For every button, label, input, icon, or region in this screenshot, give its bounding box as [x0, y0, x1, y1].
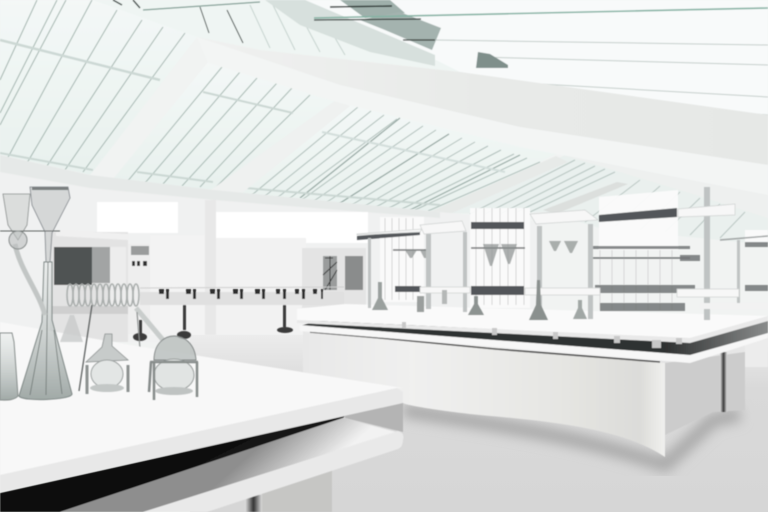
- clerestory lines: [435, 40, 768, 115]
- service rail with clamps: [133, 287, 344, 341]
- fume hood: left: [50, 230, 128, 342]
- chrome leg: [720, 352, 727, 412]
- left beaker: [0, 333, 18, 400]
- island dark gap: [300, 318, 768, 356]
- under-shelf line: [310, 332, 660, 362]
- flasks on bench: [372, 280, 587, 320]
- glassware on front bench: [0, 187, 198, 400]
- top-left glazing: [93, 0, 460, 72]
- glass tube bend: [15, 244, 45, 315]
- far-right glass stand: [700, 236, 768, 309]
- white reagent boards: [380, 190, 768, 308]
- thin stand rods: [137, 312, 143, 385]
- support block under shelf: [262, 470, 332, 512]
- window: center: [216, 212, 368, 243]
- white shelves: [357, 204, 739, 297]
- island base: [303, 331, 665, 457]
- skylight: right bays: [545, 172, 768, 245]
- back wall panel: [216, 238, 306, 334]
- far cone flask: [60, 315, 83, 342]
- clerestory: upper white panels: [290, 0, 768, 118]
- vertical tube lines: [385, 208, 672, 310]
- skylight: far left: [0, 0, 200, 175]
- mid rails: [393, 248, 690, 258]
- floor: [190, 335, 768, 512]
- rafter: center: [208, 100, 350, 198]
- floor shadow beside bench: [345, 400, 403, 432]
- left equipment behind bench: [67, 284, 163, 385]
- bench bolts: [402, 322, 682, 348]
- main roof beam: lower face: [197, 37, 768, 195]
- condenser tube: [136, 308, 163, 340]
- front lab bench: [0, 322, 403, 512]
- far equipment cabinet: [302, 248, 366, 308]
- stir rod: [79, 305, 92, 391]
- round flask stand: left: [86, 334, 128, 394]
- upper glass pane: [314, 0, 768, 50]
- skylight: third bay: [234, 100, 560, 212]
- rail supports: [133, 305, 293, 341]
- bench front lip: [297, 316, 768, 343]
- separatory funnels: [405, 241, 578, 266]
- main roof beam: upper face: [197, 37, 768, 165]
- chrome leg under shelf: [245, 495, 262, 512]
- secondary beam: [563, 155, 768, 218]
- island side: [665, 352, 745, 435]
- upright posts: [368, 187, 740, 320]
- rafter: left: [88, 37, 208, 183]
- rafter: right: [425, 156, 568, 214]
- floor shadow around island: [403, 410, 740, 465]
- round flask stand: right: [149, 336, 198, 400]
- control panel: [128, 244, 150, 334]
- skylight: fourth bay: [440, 155, 625, 214]
- island lower shelf: [300, 325, 768, 363]
- rafter: far-right bay: [543, 182, 628, 214]
- lower shelf front: [143, 431, 403, 512]
- under-bench shadow: [0, 416, 345, 512]
- bench top: [297, 304, 768, 338]
- erlenmeyer flask: [19, 262, 72, 400]
- column: [205, 200, 216, 335]
- shelving and glassware on island: [357, 187, 768, 320]
- dark reagent racks: [357, 208, 677, 295]
- small glass pane: [476, 52, 508, 68]
- right side cabinet: [745, 340, 768, 367]
- wall unit: [150, 235, 205, 335]
- bench front edge: [0, 388, 403, 492]
- skylight: second bay: [110, 62, 340, 190]
- lower shelf top: [60, 418, 400, 512]
- window: left: [97, 202, 178, 233]
- smaller funnels behind: [3, 194, 30, 240]
- back wall: [0, 155, 540, 342]
- large funnel: [30, 187, 70, 262]
- roof and skylights: [0, 0, 768, 245]
- bench top: [0, 322, 403, 475]
- central lab island: [297, 304, 768, 457]
- condenser coil: [67, 284, 139, 306]
- glazing band with pattern: [265, 0, 435, 66]
